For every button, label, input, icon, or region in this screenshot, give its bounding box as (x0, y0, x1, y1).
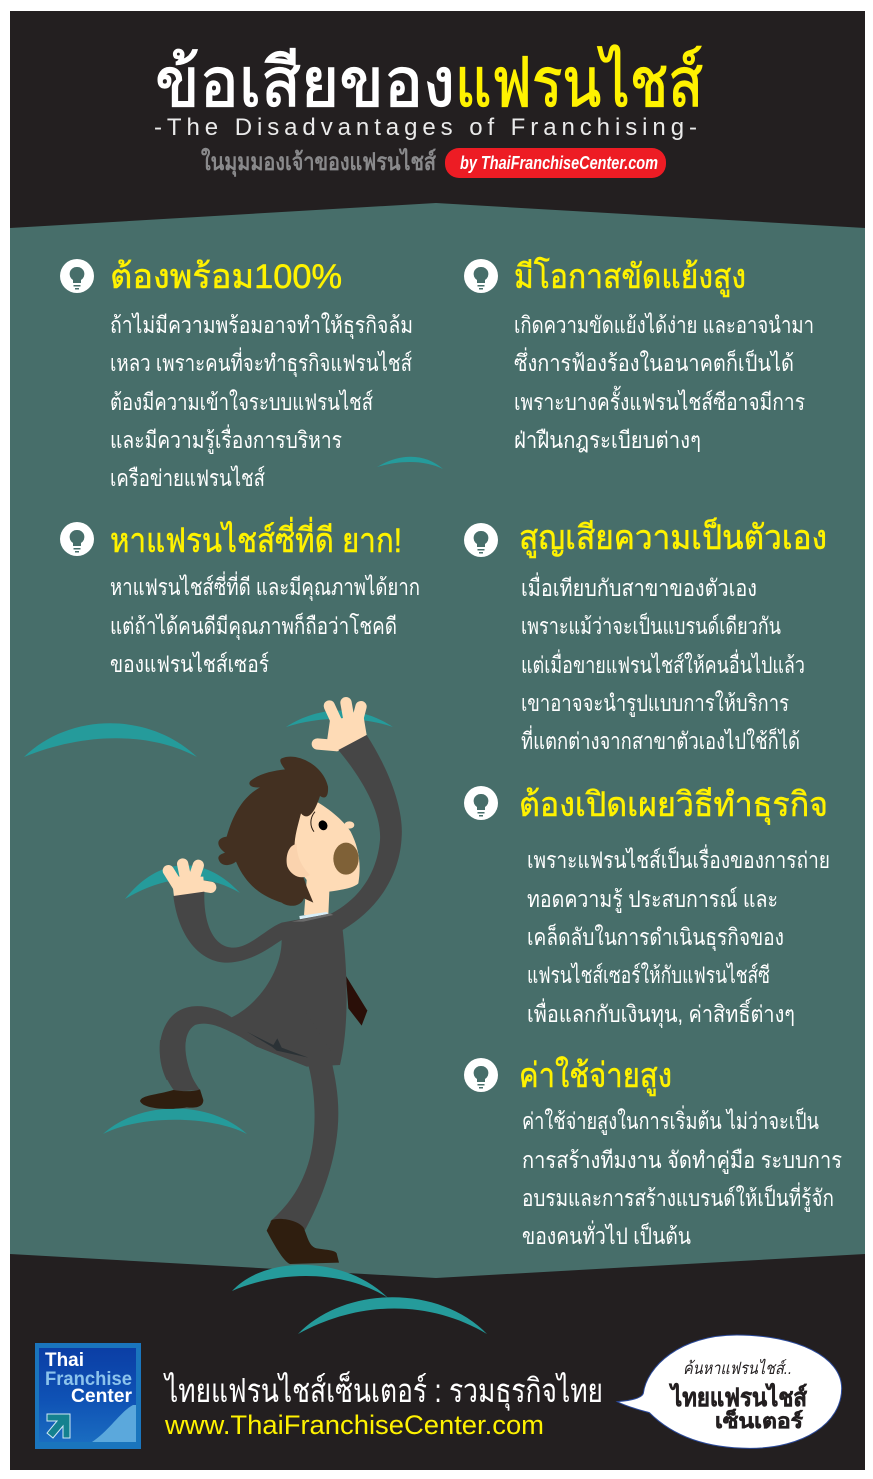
body text: เพราะบางครั้งแฟรนไชส์ซีอาจมีการ (514, 386, 805, 415)
header (154, 44, 703, 178)
body text (527, 844, 830, 1028)
icon: light bulb (60, 522, 94, 556)
body text: เพราะแม้ว่าจะเป็นแบรนด์เดียวกัน (521, 611, 781, 639)
body text (110, 571, 420, 677)
legs and shoes (140, 1040, 339, 1264)
heading: มีโอกาสขัดแย้งสูง (514, 257, 746, 297)
teal main panel (10, 203, 865, 1278)
body text (110, 312, 413, 491)
hair (218, 757, 328, 906)
icon: light bulb (464, 523, 498, 557)
tie (346, 976, 367, 1026)
thai subtitle: ในมุมมองเจ้าของแฟรนไชส์ (201, 147, 436, 178)
panel: disclosing methods (464, 786, 830, 1028)
body text: แฟรนไชส์เซอร์ให้กับแฟรนไชส์ซี (527, 962, 770, 988)
speech bubble: ไทยแฟรนไชส์ (668, 1382, 808, 1412)
lapel (292, 913, 333, 922)
icon: light bulb (464, 259, 498, 293)
hands (168, 703, 361, 887)
body text: ที่แตกต่างจากสาขาตัวเองไปใช้ก็ได้ (521, 725, 800, 754)
body text: ต้องมีความเข้าใจระบบแฟรนไชส์ (110, 389, 373, 415)
english subtitle: -The Disadvantages of Franchising- (154, 114, 697, 141)
red badge (445, 148, 666, 178)
title (155, 44, 703, 121)
body text (521, 572, 805, 754)
upper body (160, 703, 402, 1080)
logo (35, 1343, 141, 1449)
heading: ต้องพร้อม100% (110, 258, 342, 296)
body text: เพื่อแลกกับเงินทุน, ค่าสิทธิ์ต่างๆ (527, 997, 795, 1028)
heading: หาแฟรนไชส์ซี่ที่ดี ยาก! (110, 517, 402, 560)
body text: ของคนทั่วไป เป็นต้น (522, 1220, 691, 1249)
jacket pocket (247, 1032, 308, 1058)
body text: เหลว เพราะคนที่จะทำธุรกิจแฟรนไชส์ (110, 347, 412, 377)
panel: loss of identity (464, 517, 827, 754)
collar (299, 912, 330, 920)
speech bubble: ค้นหาแฟรนไชส์.. (683, 1358, 792, 1378)
body text: เมื่อเทียบกับสาขาของตัวเอง (521, 572, 757, 601)
body text: แต่ถ้าได้คนดีมีคุณภาพก็ถือว่าโชคดี (110, 611, 397, 640)
body text: ถ้าไม่มีความพร้อมอาจทำให้ธุรกิจล้ม (110, 312, 413, 339)
body text (522, 1105, 842, 1249)
icon: light bulb (464, 786, 498, 820)
body text: ซึ่งการฟ้องร้องในอนาคตก็เป็นได้ (514, 347, 794, 376)
neck and face (287, 800, 360, 915)
icon: light bulb (60, 259, 94, 293)
businessman figure (140, 703, 402, 1264)
panel: finding franchisees (60, 517, 420, 677)
title: แฟรนไชส์ (455, 44, 703, 121)
body text: ทอดความรู้ ประสบการณ์ และ (527, 886, 778, 913)
heading: ค่าใช้จ่ายสูง (519, 1056, 672, 1096)
heading: ต้องเปิดเผยวิธีทำธุรกิจ (519, 786, 828, 825)
body text: เคล็ดลับในการดำเนินธุรกิจของ (527, 922, 784, 951)
torso and arms (173, 735, 402, 1065)
logo: Franchise (45, 1369, 132, 1390)
logo: Center (71, 1386, 133, 1407)
logo: Thai (45, 1350, 84, 1371)
speech bubble: เซ็นเตอร์ (715, 1408, 803, 1433)
red badge: by ThaiFranchiseCenter.com (460, 153, 658, 173)
body text: เครือข่ายแฟรนไชส์ (110, 465, 265, 491)
body text (514, 312, 814, 453)
body text: ของแฟรนไชส์เซอร์ (110, 651, 269, 677)
icon: light bulb (464, 1058, 498, 1092)
body text: หาแฟรนไชส์ซี่ที่ดี และมีคุณภาพได้ยาก (110, 571, 420, 601)
panel: conflict (464, 257, 814, 453)
heading: สูญเสียความเป็นตัวเอง (519, 517, 827, 558)
speech bubble (617, 1335, 842, 1448)
footer (35, 1335, 842, 1449)
title: ข้อเสียของ (155, 45, 455, 121)
panel: readiness (60, 258, 413, 491)
footer tagline: ไทยแฟรนไชส์เซ็นเตอร์ : รวมธุรกิจไทย (163, 1371, 603, 1411)
body text: ฝ่าฝืนกฎระเบียบต่างๆ (514, 427, 701, 453)
ear (287, 844, 310, 877)
website url: www.ThaiFranchiseCenter.com (164, 1410, 544, 1440)
body text: และมีความรู้เรื่องการบริหาร (110, 424, 342, 454)
floating crescents (24, 457, 487, 1334)
body text: เขาอาจจะนำรูปแบบการให้บริการ (521, 690, 789, 717)
panel: high costs (464, 1056, 842, 1249)
